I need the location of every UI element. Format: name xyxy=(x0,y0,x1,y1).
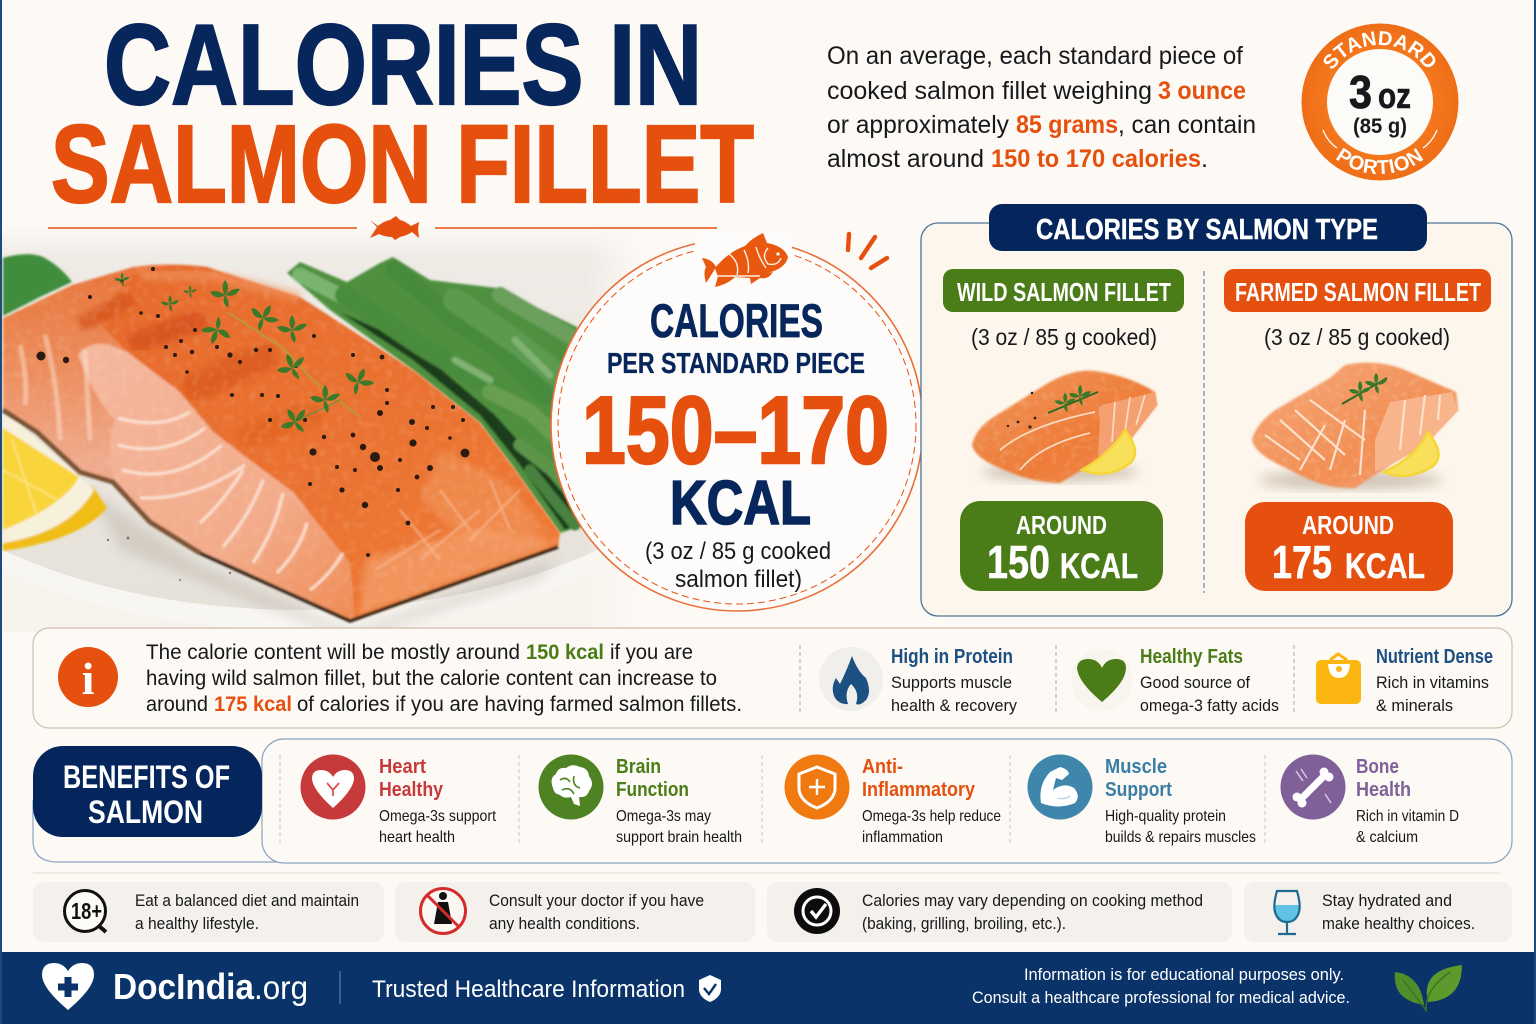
info text: having wild salmon fillet, but the calorie content can increase to xyxy=(146,667,717,690)
serving sizes: (3 oz / 85 g cooked) xyxy=(971,324,1157,350)
nutrient dense text xyxy=(1376,646,1493,715)
calorie circle: PER STANDARD PIECE xyxy=(607,348,865,380)
high in protein text xyxy=(891,646,1017,715)
wild salmon label: WILD SALMON FILLET xyxy=(957,277,1171,307)
high in protein text: health & recovery xyxy=(891,696,1017,715)
icon: leaves xyxy=(1395,965,1462,1012)
panel: benefits of salmon xyxy=(33,739,1512,863)
badge: standard portion: oz xyxy=(1378,75,1411,116)
tip: consult doctor xyxy=(395,882,755,942)
benefit: anti-inflammatory xyxy=(784,754,1001,846)
intro paragraph: cooked salmon fillet weighing xyxy=(827,77,1152,105)
intro paragraph: . xyxy=(1201,145,1208,173)
healthy fats text xyxy=(1140,646,1279,715)
tagline: Trusted Healthcare Information xyxy=(372,976,685,1003)
benefit: brain function: Function xyxy=(616,779,689,801)
tip: cooking method: Calories may vary depending on cooking method xyxy=(862,891,1203,910)
benefit: muscle support xyxy=(1028,754,1256,846)
logo wordmark: DocIndia xyxy=(113,966,255,1007)
wild calorie box: KCAL xyxy=(1060,547,1138,586)
salmon plate photo xyxy=(2,244,612,628)
tip: consult doctor: any health conditions. xyxy=(489,914,640,933)
intro paragraph: 3 ounce xyxy=(1158,77,1246,105)
wild fillet image xyxy=(972,371,1157,483)
intro paragraph: almost around xyxy=(827,145,984,173)
tip: balanced diet xyxy=(33,882,384,942)
benefit: anti-inflammatory: Inflammatory xyxy=(862,779,976,801)
panel heading: CALORIES BY SALMON TYPE xyxy=(1036,214,1378,246)
intro paragraph: or approximately xyxy=(827,111,1009,139)
benefits heading: BENEFITS OF xyxy=(63,759,230,795)
high in protein text: High in Protein xyxy=(891,646,1013,668)
pepper specks xyxy=(36,267,469,581)
panel heading xyxy=(989,204,1427,251)
high in protein text: Supports muscle xyxy=(891,673,1012,692)
tip: balanced diet: 18+ xyxy=(71,898,102,924)
disclaimer: Information is for educational purposes only. xyxy=(1024,965,1344,984)
benefit: heart healthy: Heart xyxy=(379,756,426,778)
benefit: muscle support: Support xyxy=(1105,779,1172,801)
calorie circle: 150–170 xyxy=(582,377,889,484)
tip: hydration: make healthy choices. xyxy=(1322,914,1475,933)
benefit: heart healthy: Healthy xyxy=(379,779,444,801)
calorie circle: KCAL xyxy=(670,469,811,538)
info text: around xyxy=(146,693,208,716)
nutrient dense text: & minerals xyxy=(1376,696,1453,715)
intro paragraph: 150 to 170 calories xyxy=(991,145,1201,173)
benefit: muscle support: builds & repairs muscles xyxy=(1105,829,1256,846)
wild calorie box: 150 xyxy=(987,536,1050,588)
title: SALMON FILLET xyxy=(51,103,754,226)
title: CALORIES IN xyxy=(104,2,702,129)
icon: doc india heart xyxy=(42,963,94,1010)
benefit: anti-inflammatory: inflammation xyxy=(862,829,943,846)
footer xyxy=(0,952,1536,1024)
panel: info strip xyxy=(33,628,1512,728)
info text: The calorie content will be mostly around xyxy=(146,641,520,664)
icon: nutrient bag xyxy=(1316,654,1361,704)
farmed salmon label xyxy=(1224,269,1491,312)
benefit: anti-inflammatory: Anti- xyxy=(862,756,903,778)
info text: 150 kcal xyxy=(526,641,604,664)
serving sizes: (3 oz / 85 g cooked) xyxy=(1264,324,1450,350)
farmed calorie box xyxy=(1245,502,1453,591)
benefit: heart healthy: Omega-3s support xyxy=(379,808,496,825)
badge: standard portion: PORTION xyxy=(1336,148,1424,174)
intro paragraph: On an average, each standard piece of xyxy=(827,42,1243,70)
farmed calorie box: AROUND xyxy=(1302,510,1394,540)
badge: standard portion xyxy=(1302,24,1458,180)
icon: shield xyxy=(699,975,721,1002)
healthy fats text: Healthy Fats xyxy=(1140,646,1243,668)
wild calorie box xyxy=(960,501,1163,591)
serving sizes xyxy=(971,324,1450,350)
benefit: brain function: Brain xyxy=(616,756,661,778)
calorie circle: salmon fillet) xyxy=(675,566,802,593)
badge: standard portion: (85 g) xyxy=(1353,115,1407,138)
benefit: brain function: Omega-3s may xyxy=(616,808,711,825)
intro paragraph: , can contain xyxy=(1118,111,1256,139)
tip: hydration xyxy=(1244,882,1512,942)
icon: spark lines xyxy=(848,234,887,268)
info text: 175 kcal xyxy=(214,693,292,716)
tip: cooking method xyxy=(767,882,1232,942)
wild salmon label xyxy=(943,269,1184,312)
calorie circle: CALORIES xyxy=(650,294,823,347)
salmon fillet xyxy=(3,264,560,621)
benefit: brain function: support brain health xyxy=(616,829,742,846)
wild calorie box: AROUND xyxy=(1016,510,1107,540)
tip: consult doctor: Consult your doctor if you have xyxy=(489,891,704,910)
benefit: muscle support: High-quality protein xyxy=(1105,808,1226,825)
benefits heading: SALMON xyxy=(88,794,203,830)
farmed fillet image xyxy=(1252,363,1458,489)
info text: if you are xyxy=(610,641,693,664)
panel: calories by salmon type xyxy=(921,204,1512,616)
tip: hydration: Stay hydrated and xyxy=(1322,891,1452,910)
nutrient dense text: Rich in vitamins xyxy=(1376,673,1489,692)
benefit: bone health: Health xyxy=(1356,779,1411,801)
benefit: brain function xyxy=(538,754,742,846)
nutrient dense text: Nutrient Dense xyxy=(1376,646,1493,668)
benefit: anti-inflammatory: Omega-3s help reduce xyxy=(862,808,1001,825)
calorie circle xyxy=(551,232,923,611)
tip: balanced diet: a healthy lifestyle. xyxy=(135,914,259,933)
healthy fats text: omega-3 fatty acids xyxy=(1140,696,1279,715)
intro paragraph: 85 grams xyxy=(1016,111,1118,139)
icon: flame xyxy=(819,647,883,711)
lettuce and asparagus xyxy=(3,254,600,533)
disclaimer xyxy=(972,965,1350,1007)
badge: standard portion: STANDARD xyxy=(1324,31,1436,68)
farmed calorie box: 175 xyxy=(1272,536,1332,588)
intro paragraph xyxy=(827,42,1256,173)
calorie circle: (3 oz / 85 g cooked xyxy=(645,538,831,565)
info text xyxy=(146,641,742,716)
logo wordmark: .org xyxy=(254,969,308,1006)
icon: info: i xyxy=(82,653,95,704)
benefit: heart healthy xyxy=(300,754,496,846)
icon: green heart xyxy=(1071,649,1133,711)
benefits heading xyxy=(33,746,262,837)
benefit: muscle support: Muscle xyxy=(1105,756,1167,778)
farmed calorie box: KCAL xyxy=(1345,547,1425,586)
tip: balanced diet: Eat a balanced diet and maintain xyxy=(135,891,359,910)
benefit: bone health: & calcium xyxy=(1356,829,1418,846)
icon: info xyxy=(58,647,118,707)
title xyxy=(51,2,754,226)
healthy fats text: Good source of xyxy=(1140,673,1250,692)
icon: salmon xyxy=(702,233,788,287)
badge: standard portion: 3 xyxy=(1349,66,1372,118)
benefit: bone health xyxy=(1280,754,1459,846)
info text: of calories if you are having farmed salmon fillets. xyxy=(297,693,742,716)
lemon wedge xyxy=(3,415,107,551)
disclaimer: Consult a healthcare professional for medical advice. xyxy=(972,988,1350,1007)
benefit: bone health: Bone xyxy=(1356,756,1399,778)
tip: cooking method: (baking, grilling, broiling, etc.). xyxy=(862,914,1066,933)
benefit: bone health: Rich in vitamin D xyxy=(1356,808,1459,825)
thyme sprig xyxy=(114,272,378,441)
title divider with fish xyxy=(48,216,717,240)
benefit: heart healthy: heart health xyxy=(379,829,455,846)
